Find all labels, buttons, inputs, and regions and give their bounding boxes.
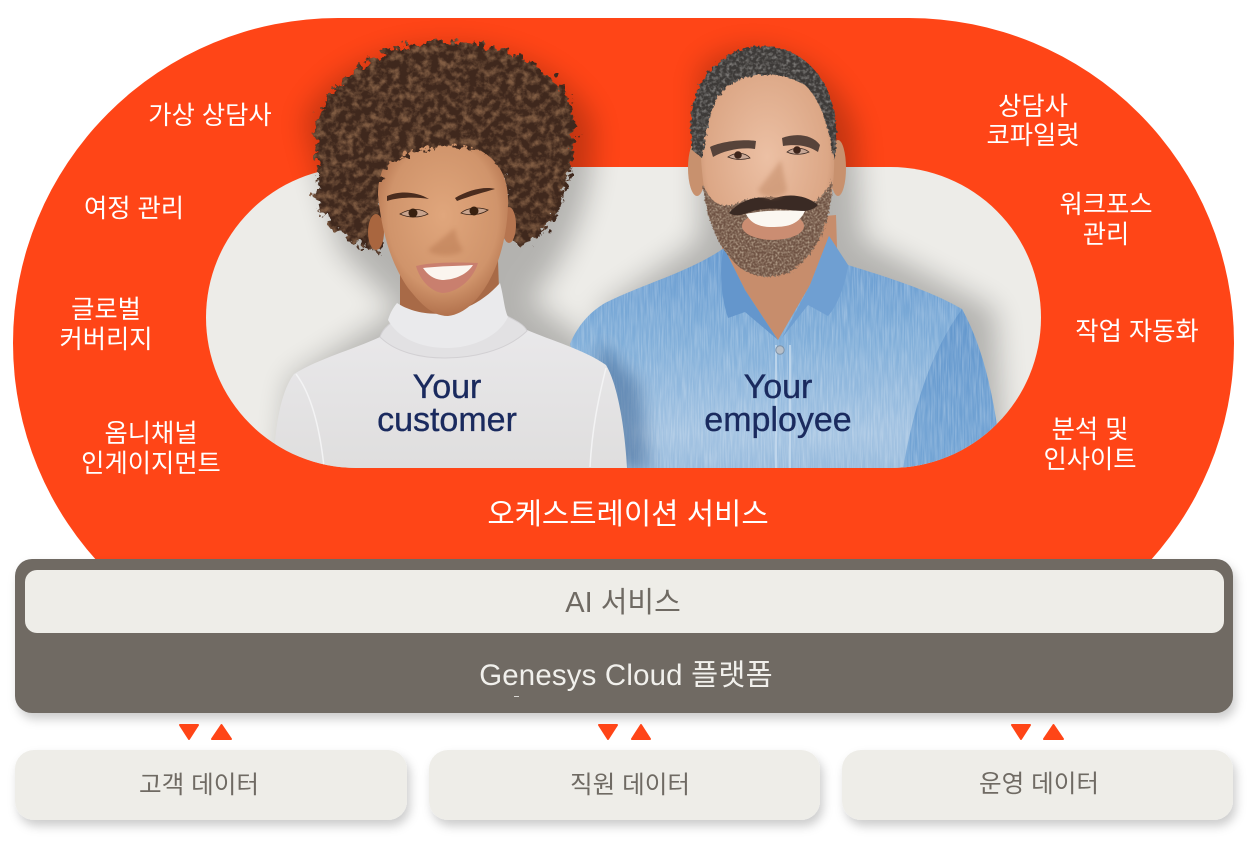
right ear — [832, 140, 846, 196]
panel: customer data — [15, 750, 407, 820]
panel: orchestration services ring — [13, 18, 1234, 668]
shadow behind people — [280, 47, 1005, 470]
panel: Genesys Cloud platform — [15, 559, 1233, 713]
text on shirt — [706, 374, 850, 438]
right eye — [787, 148, 809, 154]
side labels: right — [986, 93, 1199, 474]
shirt placket — [776, 345, 790, 468]
box — [429, 750, 820, 820]
label: omnichannel engagement: 인게이지먼트 — [81, 450, 221, 478]
platform base — [15, 559, 1233, 713]
panel: operations data — [842, 750, 1233, 820]
face — [701, 74, 834, 206]
box — [15, 750, 407, 820]
hair — [691, 46, 836, 160]
label: virtual agent: 가상 상담사 — [148, 102, 272, 130]
label: analytics and insights: 분석 및 — [1052, 416, 1128, 444]
hairline overlap — [366, 116, 526, 182]
label: 직원 데이터 — [570, 771, 690, 799]
mustache — [729, 196, 818, 215]
label: Your: Your — [744, 368, 812, 406]
right ear — [504, 207, 516, 243]
label: analytics and insights: 인사이트 — [1043, 446, 1137, 474]
text on top — [377, 368, 517, 439]
left brow — [387, 192, 429, 201]
lips — [416, 262, 478, 293]
label: task automation: 작업 자동화 — [1075, 318, 1199, 346]
nose — [758, 160, 787, 198]
right eye — [461, 208, 488, 215]
shadow from customer on shirt — [590, 340, 650, 470]
panel: inner cut-out — [206, 167, 1041, 468]
right sleeve — [903, 309, 998, 468]
label: AI services: AI 서비스 — [565, 587, 681, 619]
box — [842, 750, 1233, 820]
left iris — [734, 151, 742, 159]
label: journey management: 여정 관리 — [84, 195, 184, 223]
neck — [722, 215, 838, 345]
label: 운영 데이터 — [979, 770, 1099, 798]
right brow — [455, 188, 495, 201]
label: Genesys Cloud platform: Genesys Cloud 플랫폼 — [479, 659, 773, 692]
left collar — [721, 248, 778, 340]
label: global coverage: 커버리지 — [59, 326, 153, 354]
left ear — [368, 214, 384, 250]
arrows: employee data — [599, 725, 650, 739]
label: customer: customer — [377, 401, 517, 439]
right collar — [782, 236, 848, 338]
label: agent copilot: 상담사 — [998, 93, 1068, 121]
left ear — [688, 146, 704, 196]
people photo group — [274, 42, 1005, 470]
sleeve seam — [296, 368, 606, 467]
person: customer — [274, 42, 627, 468]
collar base — [380, 315, 527, 358]
denim shirt — [570, 236, 998, 468]
lip and skin inside beard — [742, 218, 804, 240]
left eye — [728, 153, 750, 159]
label: 고객 데이터 — [139, 771, 259, 799]
label: Your: Your — [413, 368, 481, 406]
neck — [400, 261, 499, 314]
arrows: customer data — [180, 725, 231, 739]
arrows: operations data — [1012, 725, 1063, 739]
right iris — [793, 146, 801, 154]
white top — [274, 330, 627, 468]
person: employee — [570, 46, 998, 470]
turtleneck — [388, 283, 508, 348]
bar: AI services — [25, 570, 1224, 633]
right iris — [470, 206, 478, 216]
nose — [428, 228, 463, 255]
label: global coverage: 글로벌 — [71, 296, 141, 324]
label: workforce management: 관리 — [1083, 221, 1129, 249]
label: omnichannel engagement: 옴니채널 — [104, 420, 198, 448]
heading: orchestration services: 오케스트레이션 서비스 — [487, 498, 769, 531]
teeth — [423, 265, 473, 280]
side labels: left — [59, 102, 272, 478]
right brow — [782, 135, 820, 152]
beard — [703, 180, 832, 277]
label: employee: employee — [704, 401, 852, 439]
shirt button — [776, 346, 784, 354]
left eye — [400, 210, 428, 217]
hair — [315, 42, 574, 252]
left brow — [710, 140, 756, 157]
teeth — [746, 210, 805, 227]
label: workforce management: 워크포스 — [1059, 191, 1153, 219]
left iris — [408, 208, 418, 218]
face — [378, 143, 508, 316]
label: agent copilot: 코파일럿 — [986, 122, 1080, 150]
panel: employee data — [429, 750, 820, 820]
